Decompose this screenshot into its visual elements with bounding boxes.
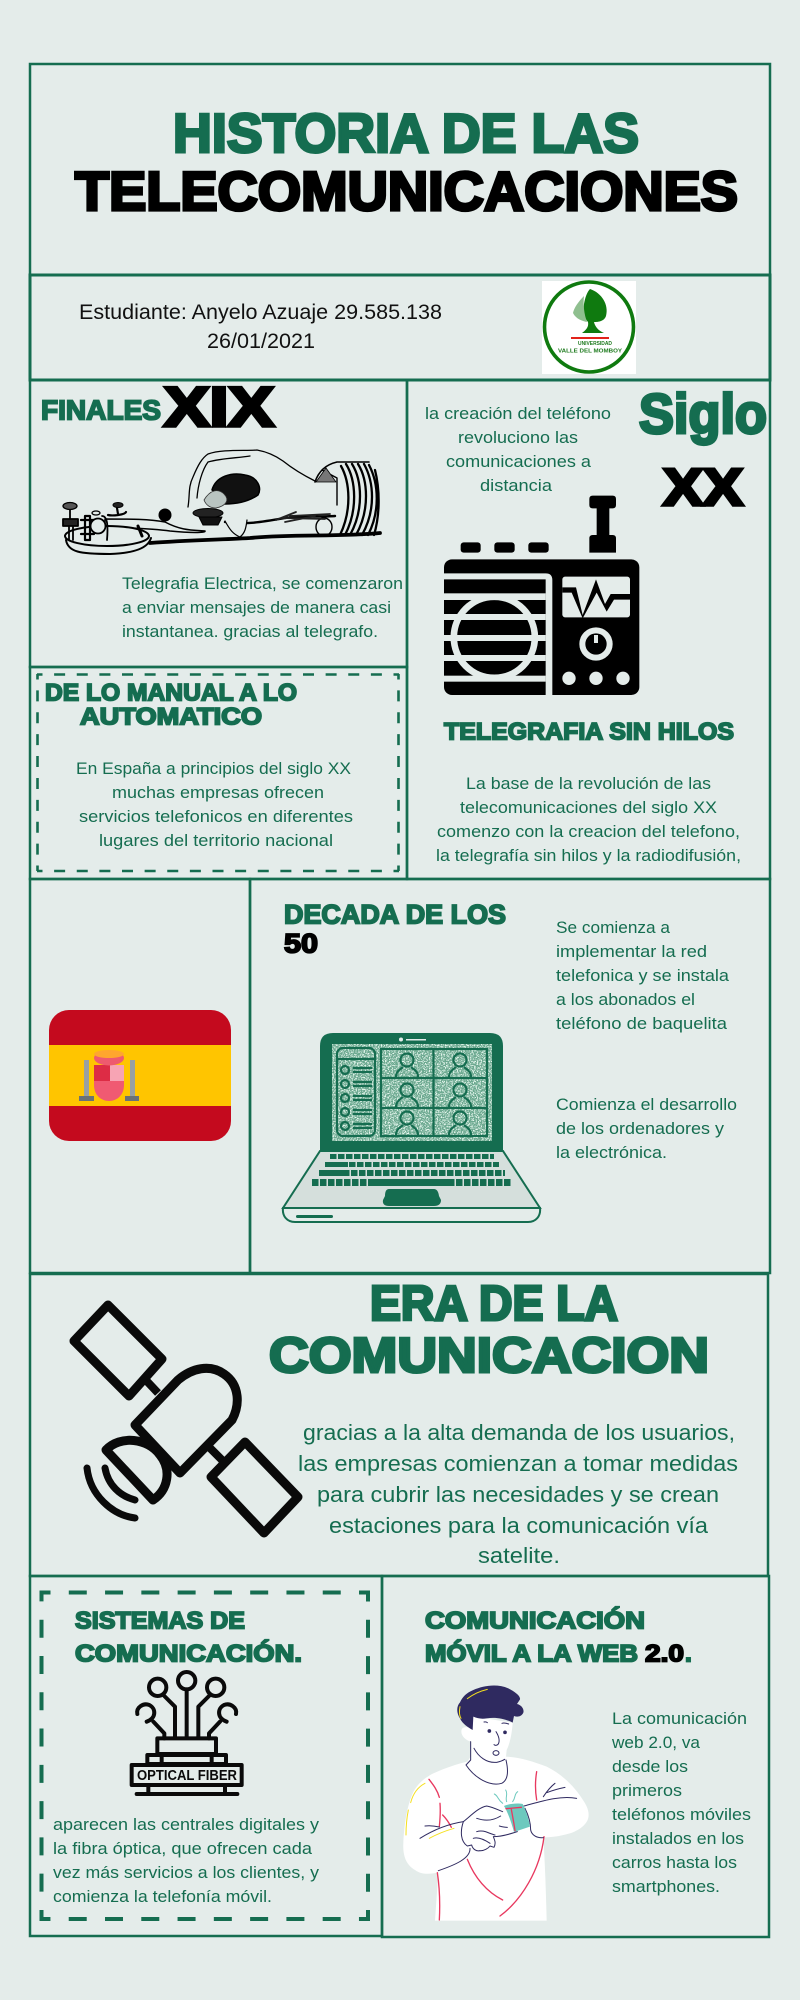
text block: red telefonica: teléfono de baquelita xyxy=(556,1014,728,1033)
text block: demanda: estaciones para la comunicación vía xyxy=(329,1513,709,1538)
heading: telegrafia sin hilos: TELEGRAFIA SIN HILOS xyxy=(444,718,734,746)
text block: web 2.0 xyxy=(611,1709,751,1896)
panel: de lo manual a lo automatico xyxy=(30,667,407,879)
panel: siglo XX xyxy=(407,380,770,879)
text block: demanda: gracias a la alta demanda de los usuarios, xyxy=(303,1420,735,1445)
text block: red telefonica: implementar la red xyxy=(556,942,707,961)
text block: ordenadores: Comienza el desarrollo xyxy=(556,1095,737,1114)
heading: comunicacion: COMUNICACION xyxy=(269,1329,709,1383)
text block: revolucion: telecomunicaciones del siglo XX xyxy=(460,798,717,817)
heading: finales: FINALES xyxy=(41,394,161,426)
text block: telefono: revoluciono las xyxy=(458,428,578,447)
text block: demanda xyxy=(298,1420,738,1568)
text block: revolucion xyxy=(436,774,741,865)
dashed frame xyxy=(37,674,399,871)
text block: web 2.0: La comunicación xyxy=(612,1709,747,1728)
text block: espana: En España a principios del siglo XX xyxy=(76,759,351,778)
text block: centrales digitales: vez más servicios a los clientes, y xyxy=(53,1863,320,1882)
heading: XIX: XIX xyxy=(164,375,274,438)
text block: telegrafia: a enviar mensajes de manera casi xyxy=(122,598,391,617)
text block: telegrafia: instantanea. gracias al telegrafo. xyxy=(122,622,378,641)
text block: web 2.0: teléfonos móviles xyxy=(612,1805,751,1824)
text block: web 2.0: carros hasta los xyxy=(612,1853,737,1872)
text block: telegrafia: Telegrafia Electrica, se comenzaron xyxy=(122,574,403,593)
heading: comunicacion movil xyxy=(425,1606,692,1668)
icon: telegraph key xyxy=(63,450,380,554)
text block: revolucion: la telegrafía sin hilos y la radiodifusión, xyxy=(436,846,741,865)
panel: flag xyxy=(30,879,250,1273)
text block: espana: lugares del territorio nacional xyxy=(99,831,333,850)
heading: manual automatico: DE LO MANUAL A LO xyxy=(45,680,297,706)
icon: university logo xyxy=(542,281,636,374)
icon: optical fiber: OPTICAL FIBER xyxy=(137,1768,237,1784)
panel: comunicacion movil xyxy=(382,1576,769,1937)
panel: finales XIX xyxy=(30,375,407,667)
dashed frame xyxy=(42,1592,368,1919)
panel: decada de los 50 xyxy=(250,879,770,1273)
icon: university logo: VALLE DEL MOMBOY xyxy=(558,348,622,354)
heading: sistemas: SISTEMAS DE xyxy=(75,1608,245,1634)
text block: web 2.0: web 2.0, va xyxy=(611,1733,701,1752)
heading: comunicacion movil: COMUNICACIÓN xyxy=(425,1606,645,1634)
text block: web 2.0: smartphones. xyxy=(612,1877,720,1896)
text block: espana: servicios telefonicos en diferentes xyxy=(79,807,353,826)
text block: web 2.0: desde los xyxy=(612,1757,688,1776)
text block: telefono xyxy=(425,404,611,495)
heading: era de la: ERA DE LA xyxy=(370,1277,618,1331)
heading: manual automatico: AUTOMATICO xyxy=(80,704,262,730)
heading: 50: 50 xyxy=(284,928,318,958)
text block: red telefonica: telefonica y se instala xyxy=(556,966,730,985)
title line 2: TELECOMUNICACIONES xyxy=(75,160,738,222)
text block: centrales digitales: la fibra óptica, que ofrecen cada xyxy=(53,1839,313,1858)
icon: university logo: UNIVERSIDAD xyxy=(578,341,612,347)
text block: revolucion: comenzo con la creacion del telefono, xyxy=(437,822,740,841)
text block: centrales digitales: comienza la telefonía móvil. xyxy=(53,1887,272,1906)
text block: telegrafia xyxy=(122,574,403,641)
title line 1: HISTORIA DE LAS xyxy=(173,102,639,164)
heading: comunicacion movil: . xyxy=(685,1640,692,1668)
text block: ordenadores: la electrónica. xyxy=(556,1143,667,1162)
icon: satellite xyxy=(74,1305,298,1533)
panel: era de la comunicacion xyxy=(30,1274,768,1576)
text block: red telefonica: Se comienza a xyxy=(556,918,671,937)
text block: red telefonica: a los abonados el xyxy=(556,990,695,1009)
panel: student xyxy=(30,275,770,380)
text block: centrales digitales xyxy=(53,1815,320,1906)
text block: espana xyxy=(76,759,353,850)
heading: comunicacion movil: MÓVIL A LA WEB xyxy=(425,1640,638,1668)
text block: demanda: las empresas comienzan a tomar medidas xyxy=(298,1451,738,1476)
text block: telefono: la creación del teléfono xyxy=(425,404,611,423)
text block: web 2.0: primeros xyxy=(612,1781,682,1800)
heading: sistemas xyxy=(75,1608,302,1668)
text block: red telefonica xyxy=(556,918,730,1033)
heading: XX: XX xyxy=(663,459,743,517)
panel: title xyxy=(30,64,770,275)
icon: spanish flag xyxy=(49,1010,231,1141)
text block: revolucion: La base de la revolución de las xyxy=(466,774,711,793)
panel: sistemas de comunicacion xyxy=(30,1576,382,1936)
illustration: man looking at smartwatch xyxy=(403,1686,589,1921)
heading: siglo: Siglo xyxy=(639,382,767,445)
text block: demanda: para cubrir las necesidades y se crean xyxy=(317,1482,719,1507)
text block: demanda: satelite. xyxy=(478,1543,560,1568)
heading: manual automatico xyxy=(45,680,297,730)
text block: espana: muchas empresas ofrecen xyxy=(112,783,324,802)
heading: sistemas: COMUNICACIÓN. xyxy=(75,1640,302,1668)
student name: Estudiante: Anyelo Azuaje 29.585.138 xyxy=(79,300,442,324)
text block: ordenadores: de los ordenadores y xyxy=(556,1119,725,1138)
text block: centrales digitales: aparecen las centrales digitales y xyxy=(53,1815,320,1834)
heading: decada: DECADA DE LOS xyxy=(284,900,506,930)
text block: web 2.0: instalados en los xyxy=(612,1829,744,1848)
text block: telefono: comunicaciones a xyxy=(446,452,592,471)
text block: ordenadores xyxy=(556,1095,737,1162)
icon: radio xyxy=(444,496,639,695)
icon: optical fiber xyxy=(132,1672,242,1794)
date: 26/01/2021 xyxy=(207,329,315,353)
icon: laptop video call xyxy=(283,1033,540,1222)
heading: comunicacion movil: 2.0 xyxy=(645,1640,684,1668)
text block: telefono: distancia xyxy=(480,476,553,495)
